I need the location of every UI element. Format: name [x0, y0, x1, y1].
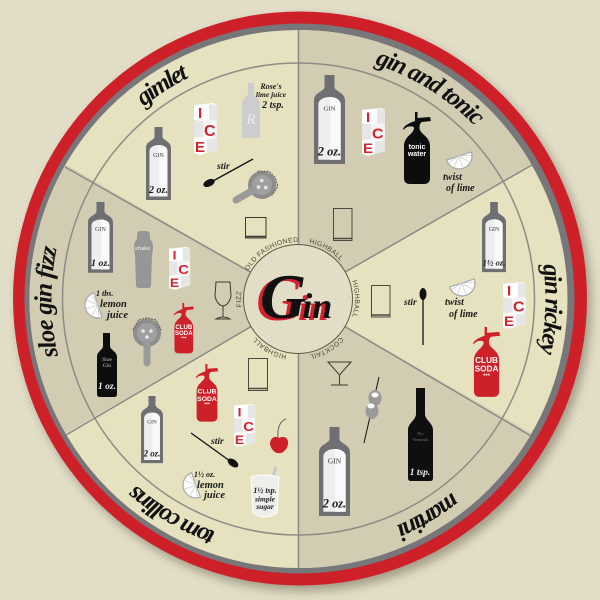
gin rickey: ice: C: [513, 299, 525, 315]
tom collins: simple sugar glass: 1½ tsp.: [253, 486, 277, 495]
gin and tonic: ice: [362, 108, 385, 157]
gimlet: gin bottle: GIN: [153, 153, 164, 159]
sloe gin fizz: ice: E: [170, 276, 179, 290]
martini: cocktail glass: [328, 362, 351, 385]
martini: vermouth bottle: 1 tsp.: [410, 468, 430, 478]
tom collins: lemon label: lemon: [197, 480, 224, 491]
sloe gin fizz: lemon label: lemon: [100, 299, 127, 310]
gimlet: gin bottle: 2 oz.: [148, 185, 168, 196]
tom collins: lemon wedge: [179, 473, 200, 502]
gin and tonic: lime label: twist: [443, 172, 463, 183]
gin rickey: highball glass: [372, 286, 390, 317]
title: martini: martini: [396, 492, 458, 542]
title: sloe gin fizz: sloe gin fizz: [34, 246, 58, 356]
tom collins: simple sugar glass: [251, 467, 279, 517]
glass label: highball 3: HIGHBALL: [254, 337, 286, 360]
tom collins: lemon label: juice: [202, 490, 225, 501]
sloe gin fizz: ice: C: [178, 262, 189, 277]
gimlet: old fashioned glass: [246, 218, 266, 238]
gimlet: Rose's label: [256, 82, 287, 111]
tom collins: highball glass: [248, 358, 268, 390]
gin and tonic: tonic water siphon: tonic: [409, 144, 425, 151]
gimlet: Rose's label: Rose's: [259, 82, 282, 91]
martini: vermouth bottle: Vermouth: [413, 437, 428, 442]
gin rickey: stir spoon: [403, 288, 426, 345]
gin rickey: club soda siphon: ***: [483, 373, 491, 379]
gin rickey: ice: I: [507, 284, 511, 299]
gin and tonic: ice: C: [372, 126, 384, 142]
gin and tonic: lime label: of lime: [446, 183, 475, 194]
sloe gin fizz: club soda siphon: [174, 303, 194, 353]
tom collins: gin bottle: [141, 396, 163, 463]
title: gin rickey: gin rickey: [536, 264, 562, 356]
martini: olives on pick: [364, 377, 382, 443]
sloe gin fizz: sloe gin bottle: Gin: [103, 363, 111, 369]
panel: gin and tonic: [298, 30, 532, 299]
logo: Gin: Gin: [256, 263, 328, 334]
glass label: highball 2: HIGHBALL: [352, 280, 360, 317]
gin rickey: lime label: of lime: [449, 309, 478, 320]
tom collins: stir spoon: [191, 433, 240, 469]
gin and tonic: tonic water siphon: water: [407, 151, 426, 158]
title: gimlet: gimlet: [140, 65, 189, 110]
sloe gin fizz: lemon label: 1 tbs.: [96, 289, 113, 298]
sloe gin fizz: lemon label: [96, 289, 128, 321]
tom collins: club soda siphon: [196, 364, 218, 422]
sloe gin fizz: club soda siphon: CLUB: [175, 325, 193, 331]
tom collins: lemon label: [194, 470, 225, 501]
gimlet: ice: [194, 103, 217, 156]
tom collins: simple sugar glass: simple: [254, 494, 276, 504]
gimlet: gin bottle: [146, 127, 171, 200]
sloe gin fizz: ice: I: [173, 248, 177, 262]
sloe gin fizz: shaker: [134, 231, 153, 288]
gin rickey: gin bottle: 1½ oz.: [483, 257, 505, 267]
sloe gin fizz: fizz glass: [215, 282, 231, 319]
gin and tonic: ice: E: [363, 142, 373, 157]
sloe gin fizz: sloe gin bottle: [97, 333, 117, 397]
center medallion: [236, 237, 360, 360]
gimlet: Rose's bottle: R: [245, 112, 256, 128]
gimlet: stir spoon: [202, 159, 253, 189]
gimlet: Rose's label: lime juice: [256, 90, 287, 99]
gin rickey: gin bottle: [482, 202, 506, 272]
gimlet: Rose's bottle: [242, 83, 260, 138]
glass label: cocktail: COCKTAIL: [310, 338, 343, 359]
tom collins: club soda siphon: CLUB: [198, 389, 217, 396]
martini: vermouth bottle: [408, 388, 433, 481]
glass label: highball 1: HIGHBALL: [310, 238, 342, 261]
gin and tonic: ice: I: [366, 110, 370, 126]
sloe gin fizz: sloe gin bottle: Sloe: [102, 357, 112, 363]
tom collins: cherry: [270, 419, 288, 453]
gin rickey: club soda siphon: [473, 327, 500, 397]
gin and tonic: lime twist: [447, 152, 475, 172]
gin and tonic: tonic water siphon: [403, 112, 431, 184]
glass label: fizz: FIZZ: [236, 291, 242, 307]
tom collins: club soda siphon: SODA: [197, 396, 217, 403]
title: tom collins: tom collins: [128, 486, 214, 544]
gin rickey: gin bottle: GIN: [489, 227, 500, 233]
gin rickey: lime label: twist: [445, 297, 465, 308]
gimlet: stir spoon: stir: [216, 162, 230, 172]
glass label: old fashioned: OLD FASHIONED: [245, 237, 298, 270]
sloe gin fizz: lemon label: juice: [105, 310, 128, 321]
sloe gin fizz: sloe gin bottle: 1 oz.: [98, 382, 116, 392]
tom collins: lemon label: 1½ oz.: [194, 470, 215, 479]
martini: vermouth bottle: Dry: [417, 431, 424, 436]
tom collins: gin bottle: 2 oz.: [143, 449, 160, 459]
panel: martini: [298, 299, 532, 568]
tom collins: simple sugar glass: sugar: [255, 502, 274, 511]
gin rickey: ice: E: [504, 315, 514, 330]
sloe gin fizz: club soda siphon: SODA: [175, 331, 193, 337]
tom collins: ice: C: [243, 419, 254, 434]
gin and tonic: gin bottle: GIN: [323, 105, 336, 112]
gimlet: Rose's label: 2 tsp.: [261, 100, 284, 111]
gin rickey: club soda siphon: CLUB: [475, 356, 498, 365]
gin and tonic: gin bottle: [314, 75, 345, 164]
tom collins: gin bottle: GIN: [147, 420, 157, 426]
tom collins: ice: E: [235, 433, 244, 447]
gin and tonic: gin bottle: 2 oz.: [317, 145, 341, 158]
martini: gin bottle: 2 oz.: [322, 497, 346, 510]
gin and tonic: highball glass: [334, 208, 352, 240]
sloe gin fizz: lemon wedge: [82, 293, 102, 321]
gin rickey: stir spoon: stir: [403, 298, 417, 308]
sloe gin fizz: gin bottle: 1 oz.: [91, 258, 110, 269]
gin rickey: ice: [503, 282, 526, 330]
sloe gin fizz: club soda siphon: ***: [181, 335, 187, 340]
tom collins: ice: I: [238, 405, 242, 419]
gimlet: ice: C: [204, 123, 216, 140]
gin and tonic: lime label: [443, 172, 475, 194]
gimlet: ice: E: [195, 139, 205, 156]
tom collins: stir spoon: stir: [210, 437, 224, 447]
gimlet: strainer: [229, 165, 282, 212]
gimlet: ice: I: [198, 105, 202, 122]
sloe gin fizz: shaker: shake: [135, 246, 150, 252]
sloe gin fizz: ice: [169, 247, 190, 290]
panel: sloe gin fizz: [29, 164, 299, 434]
sloe gin fizz: gin bottle: GIN: [95, 227, 107, 233]
martini: gin bottle: GIN: [328, 457, 342, 466]
gin rickey: lime label: [445, 297, 478, 320]
tom collins: ice: [234, 404, 255, 447]
logo: Gin: Gin: [260, 261, 332, 332]
sloe gin fizz: gin bottle: [88, 202, 113, 273]
title: gin and tonic: gin and tonic: [372, 53, 483, 124]
gin rickey: club soda siphon: SODA: [475, 365, 498, 374]
tom collins: club soda siphon: ***: [204, 402, 210, 408]
sloe gin fizz: strainer: [133, 318, 161, 363]
gin rickey: lime twist: [450, 279, 478, 299]
martini: gin bottle: [319, 427, 350, 516]
